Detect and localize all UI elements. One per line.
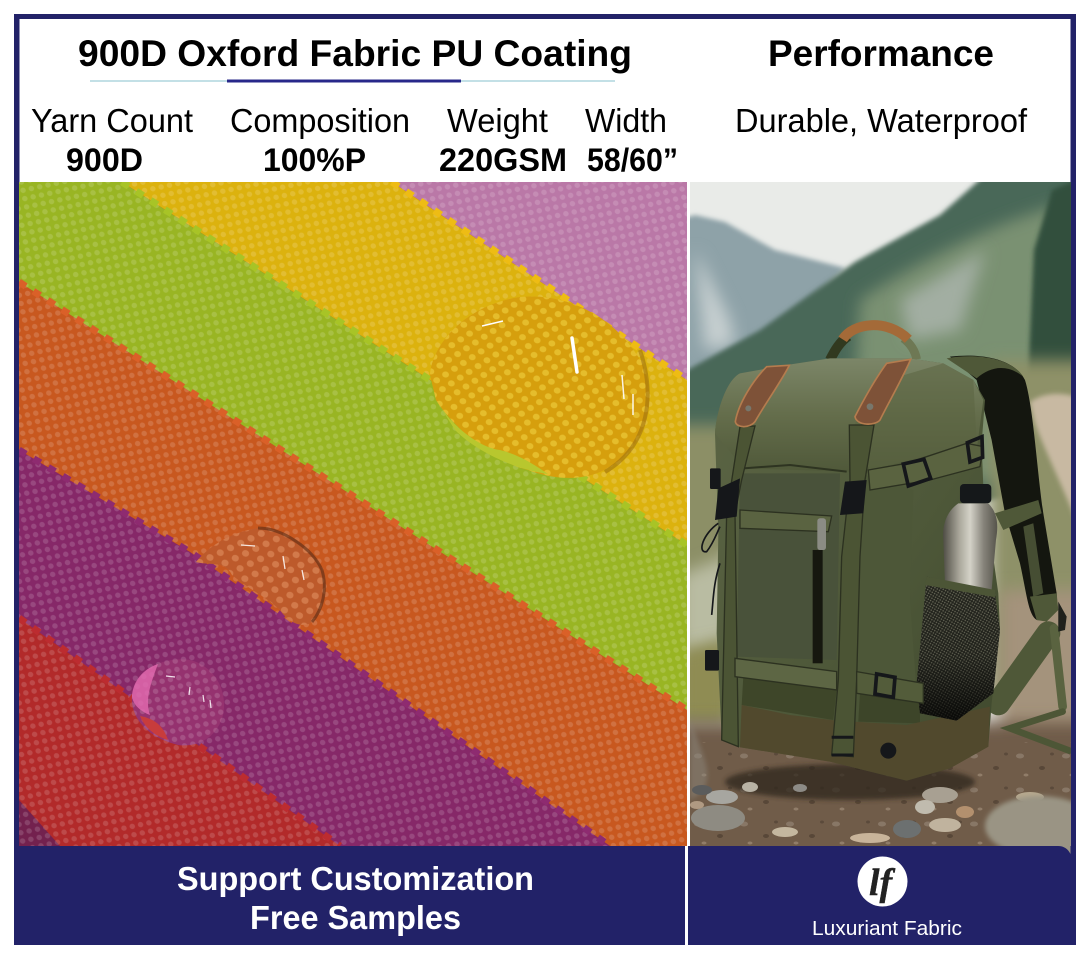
spec: composition: 100%P (263, 142, 366, 178)
lower shoulder straps (998, 628, 1069, 751)
title underline (90, 80, 615, 82)
backpack (702, 325, 1069, 781)
carry handle (830, 325, 917, 360)
plastic buckles (705, 468, 896, 759)
spec: weight (439, 102, 567, 178)
footer panel: brand (688, 846, 1076, 945)
padded shoulder strap (950, 356, 1057, 620)
frame buckles (832, 437, 983, 755)
performance description: Durable, Waterproof (735, 102, 1028, 139)
front panel shadow folds (737, 473, 840, 660)
footer text: customization: Free Samples (250, 899, 461, 936)
mesh side pocket (917, 577, 1000, 721)
spec: width: Width (585, 102, 667, 139)
photo: backpack in mountains (690, 182, 1071, 846)
spec: yarn count: 900D (66, 142, 143, 178)
water drop: orange (196, 528, 325, 625)
spec: weight: 220GSM (439, 142, 567, 178)
serrated stripe edges (19, 182, 687, 846)
heading: performance: Performance (768, 33, 994, 74)
spec: weight: Weight (447, 102, 548, 139)
brand logo: lf (869, 862, 896, 904)
brand name: Luxuriant Fabric (812, 918, 962, 940)
spec: width: 58/60” (587, 142, 678, 178)
leather tabs (735, 359, 911, 427)
brown base panel (740, 705, 990, 781)
webbing straps (722, 425, 983, 757)
rocky ground (690, 712, 1071, 846)
tab rivets (745, 403, 873, 411)
spec: composition: Composition (230, 102, 410, 139)
spec: composition (230, 102, 410, 178)
footer panel: customization (14, 846, 685, 945)
mountain background (690, 182, 1071, 734)
spec: yarn count: Yarn Count (31, 102, 193, 139)
main pack body (715, 358, 1000, 781)
brand logo (858, 856, 908, 906)
water bottle (943, 484, 997, 590)
photo: coated fabric swatch (19, 182, 687, 846)
footer text: customization: Support Customization (177, 860, 534, 897)
footer text: customization (177, 860, 534, 936)
footer divider (685, 846, 688, 945)
side cord (702, 523, 720, 615)
title: 900D Oxford Fabric PU Coating (78, 33, 632, 74)
water drop: pink (132, 659, 224, 745)
fabric stripes (19, 182, 687, 846)
zipper (813, 518, 826, 663)
spec: width (585, 102, 678, 178)
top flap (717, 358, 984, 444)
spec: yarn count (31, 102, 193, 178)
water drop: yellow (430, 296, 649, 478)
